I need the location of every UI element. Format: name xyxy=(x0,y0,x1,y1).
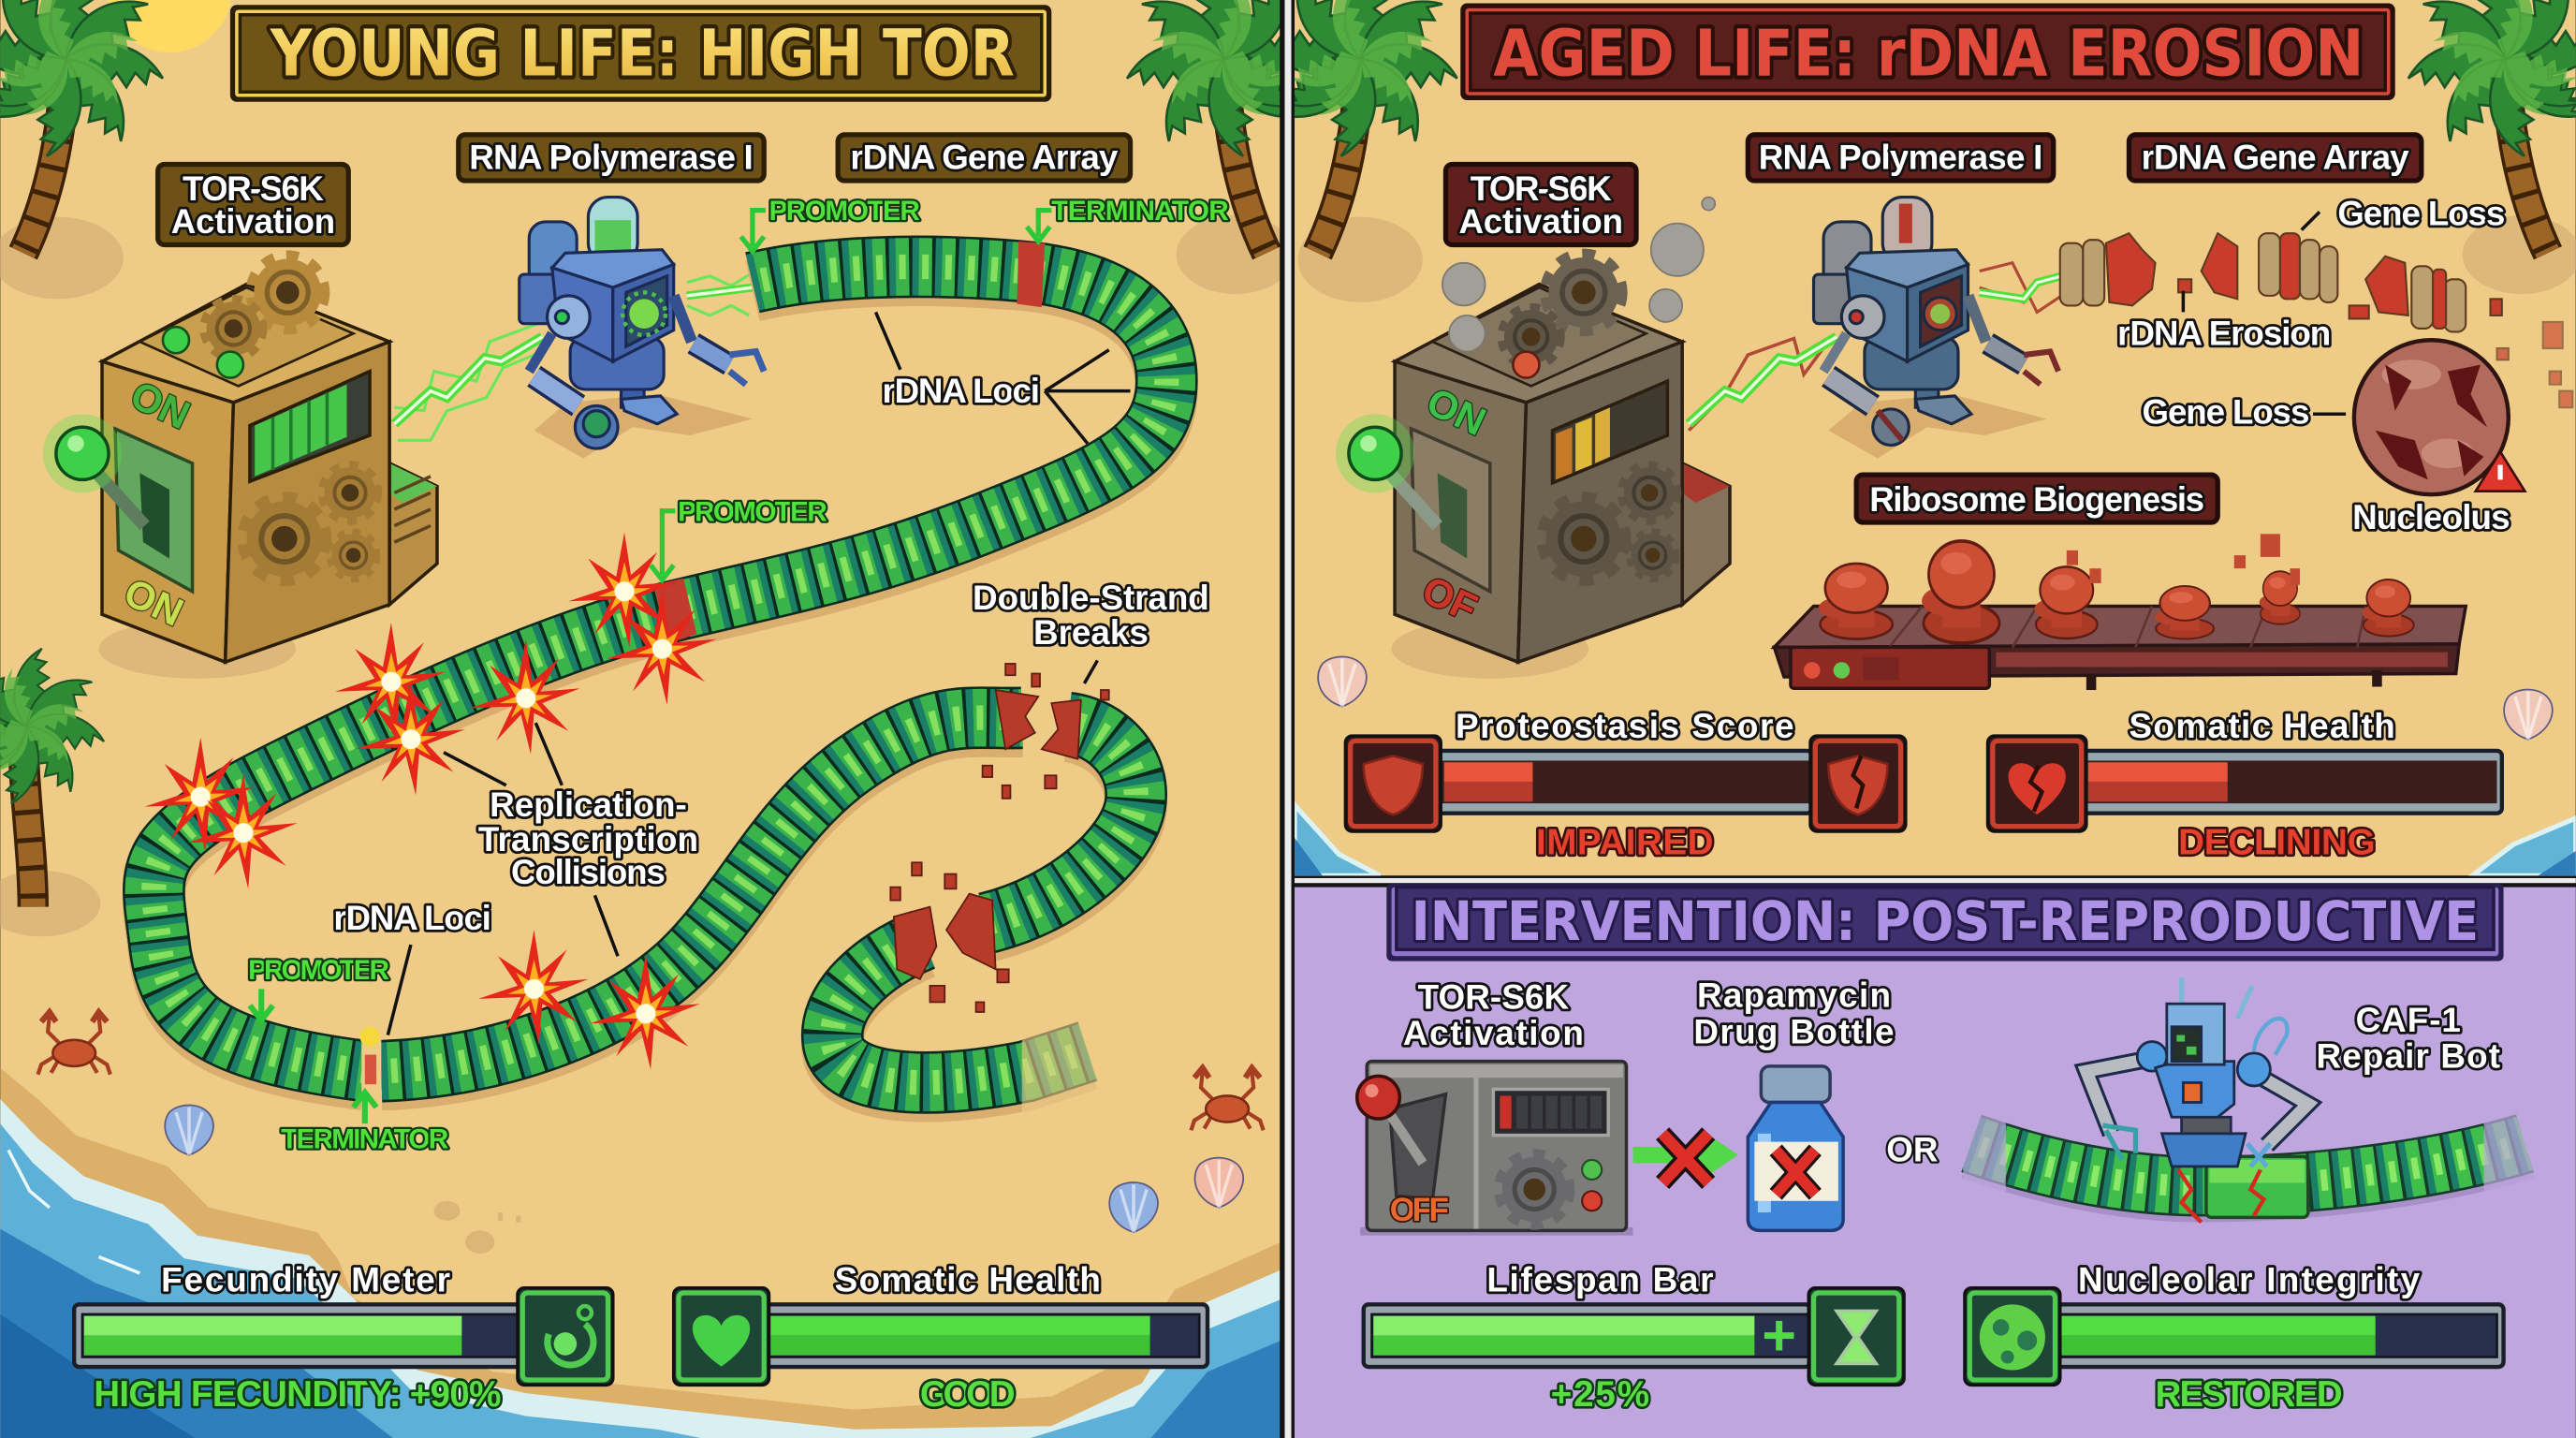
meter: somatic health declining: DECLINING xyxy=(2178,823,2376,863)
label and arrow: promoter middle xyxy=(651,496,827,580)
crab left xyxy=(38,1012,110,1075)
meter: lifespan xyxy=(1364,1260,1904,1415)
machine: TOR-S6K aged: ON xyxy=(1420,379,1492,444)
label: TOR-S6K Activation: TOR-S6K xyxy=(183,169,324,208)
meter: somatic health good xyxy=(674,1260,1208,1415)
smoke puffs xyxy=(1442,198,1715,352)
double-strand breaks: lower xyxy=(890,862,1009,1012)
label and arrow: terminator top: TERMINATOR xyxy=(1051,196,1229,227)
label: TOR-S6K Activation aged: TOR-S6K xyxy=(1471,169,1612,208)
label: rDNA Gene Array aged: rDNA Gene Array xyxy=(2142,139,2409,177)
label: TOR-S6K Activation: Activation xyxy=(171,202,335,241)
machine: TOR-S6K aged: OF xyxy=(1415,567,1484,630)
lightning: machine to polymerase xyxy=(394,322,542,440)
panel: aged life xyxy=(1258,0,2576,875)
leader lines xyxy=(388,312,1131,1035)
label: rapamycin drug bottle: Rapamycin xyxy=(1697,976,1891,1015)
meter: fecundity: HIGH FECUNDITY: +90% xyxy=(94,1374,501,1415)
label: RNA Polymerase I aged: RNA Polymerase I xyxy=(1759,139,2042,177)
label: TOR-S6K Activation intervention xyxy=(1403,977,1584,1052)
leader lines aged xyxy=(2183,212,2346,414)
label: rDNA Loci lower: rDNA Loci xyxy=(333,899,491,937)
repair patch xyxy=(2178,1156,2308,1223)
nucleolus xyxy=(2354,340,2525,494)
label: replication-transcription collisions: Replication- xyxy=(490,785,687,824)
label: CAF-1 repair bot: Repair Bot xyxy=(2317,1037,2500,1076)
label: rapamycin drug bottle: Drug Bottle xyxy=(1693,1012,1895,1050)
switch box off xyxy=(1357,1062,1633,1236)
lightning: aged machine to polymerase xyxy=(1689,263,2062,431)
label: replication-transcription collisions: Transcription xyxy=(478,820,698,858)
label: CAF-1 repair bot: CAF-1 xyxy=(2356,1001,2461,1039)
arrow blocked by X xyxy=(1633,1130,1738,1182)
meter: proteostasis score: IMPAIRED xyxy=(1536,823,1714,863)
eroded rDNA fragments xyxy=(2060,233,2572,407)
meter: nucleolar integrity xyxy=(1965,1260,2504,1415)
machine: TOR-S6K on: ON xyxy=(118,570,190,635)
label: TOR-S6K Activation intervention: Activation xyxy=(1403,1014,1584,1052)
explosions: replication-transcription collisions xyxy=(145,533,716,1069)
machine: TOR-S6K aged xyxy=(1336,254,1730,679)
panel: young life xyxy=(0,0,1326,1438)
title: young life: YOUNG LIFE: HIGH TOR xyxy=(270,17,1015,92)
palm tree mid left xyxy=(0,644,109,936)
label and arrow: promoter lower xyxy=(248,955,389,1020)
label: TOR-S6K Activation aged: Activation xyxy=(1459,202,1623,241)
meter: somatic health good: GOOD xyxy=(920,1374,1016,1415)
label: TOR-S6K Activation aged xyxy=(1445,164,1636,244)
shells xyxy=(1318,656,2553,740)
sand footprints xyxy=(433,1201,520,1254)
double-strand breaks: upper xyxy=(983,664,1109,799)
conveyor belt with ribosomes xyxy=(1774,534,2466,690)
label: rDNA Gene Array: rDNA Gene Array xyxy=(850,139,1119,177)
meter: nucleolar integrity: RESTORED xyxy=(2156,1374,2343,1415)
crab right xyxy=(1191,1068,1264,1130)
meter: somatic health good: Somatic Health xyxy=(835,1260,1101,1299)
meter: lifespan: Lifespan Bar xyxy=(1486,1260,1714,1299)
label: nucleolus: Nucleolus xyxy=(2352,498,2510,536)
palm tree right xyxy=(2403,0,2576,294)
label and arrow: promoter top xyxy=(741,196,920,251)
label: double-strand breaks: Breaks xyxy=(1033,613,1149,652)
label: OR: OR xyxy=(1886,1131,1938,1169)
meter: somatic health declining: Somatic Health xyxy=(2129,707,2395,745)
meter: fecundity xyxy=(74,1260,613,1415)
coil fade ends xyxy=(1963,1104,2533,1193)
sun xyxy=(107,0,232,52)
palm tree top left xyxy=(0,0,168,299)
palm tree left xyxy=(1295,0,1458,302)
meter: lifespan: +25% xyxy=(1551,1374,1649,1415)
label: gene loss top: Gene Loss xyxy=(2337,194,2505,232)
rapamycin bottle xyxy=(1748,1066,1843,1230)
panel: intervention xyxy=(1295,884,2576,1438)
machine: TOR-S6K on: ON xyxy=(124,373,197,437)
label and arrow: promoter lower: PROMOTER xyxy=(248,955,389,986)
meter: proteostasis score: Proteostasis Score xyxy=(1456,707,1793,745)
label: ribosome biogenesis: Ribosome Biogenesis xyxy=(1869,480,2204,519)
coil end fade xyxy=(1022,1021,1097,1112)
label and arrow: promoter middle: PROMOTER xyxy=(678,496,827,527)
robot: RNA Polymerase I xyxy=(520,198,764,459)
label: TOR-S6K Activation intervention: TOR-S6K xyxy=(1418,977,1569,1016)
switch box off: OFF xyxy=(1390,1192,1449,1228)
machine: TOR-S6K on xyxy=(43,256,437,679)
lightning: polymerase to coil xyxy=(687,272,753,315)
label: replication-transcription collisions: Collisions xyxy=(511,853,666,891)
label and arrow: terminator lower: TERMINATOR xyxy=(281,1124,448,1155)
label and arrow: promoter top: PROMOTER xyxy=(768,196,920,227)
label: RNA Polymerase I: RNA Polymerase I xyxy=(469,139,754,177)
shells xyxy=(165,1106,1243,1232)
meter: nucleolar integrity: Nucleolar Integrity xyxy=(2078,1260,2421,1299)
coil: repaired segment xyxy=(1971,1143,2525,1193)
label: CAF-1 repair bot xyxy=(2317,1001,2500,1076)
corner water xyxy=(1295,805,2576,875)
shoreline water xyxy=(0,1068,1284,1438)
label: gene loss middle: Gene Loss xyxy=(2143,393,2310,432)
label: double-strand breaks xyxy=(973,579,1209,652)
label and arrow: terminator lower xyxy=(281,1093,448,1155)
meter: somatic health declining xyxy=(1988,707,2502,863)
robot: RNA Polymerase I aged xyxy=(1814,198,2058,459)
robot: CAF-1 repair bot xyxy=(2086,977,2308,1167)
label: replication-transcription collisions xyxy=(478,785,698,891)
red terminator and promoter bands xyxy=(360,242,1045,1104)
meter: fecundity: Fecundity Meter xyxy=(161,1260,450,1299)
title: aged life: AGED LIFE: rDNA EROSION xyxy=(1493,17,2364,92)
palm tree top right xyxy=(1126,0,1281,294)
label: double-strand breaks: Double-Strand xyxy=(973,579,1209,617)
label: TOR-S6K Activation xyxy=(158,164,348,244)
label: rDNA Loci: rDNA Loci xyxy=(883,372,1040,410)
meter: proteostasis score xyxy=(1345,707,1906,863)
panel dividers xyxy=(1280,0,2576,1438)
label and arrow: terminator top xyxy=(1027,196,1229,242)
label: rapamycin drug bottle xyxy=(1693,976,1895,1050)
label: rDNA erosion: rDNA Erosion xyxy=(2117,315,2331,353)
coil: rDNA gene array xyxy=(154,267,1166,1091)
title: intervention: INTERVENTION: POST-REPRODUCTIVE xyxy=(1412,889,2479,953)
